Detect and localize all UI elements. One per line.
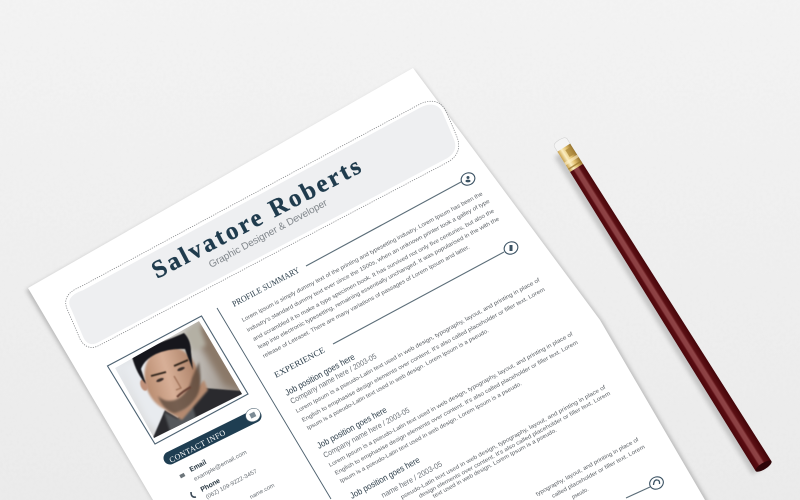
job entry 1: Ipsum is a pseudo-Latin text used in web design. Lorem Ipsum is a pseudo. (306, 328, 490, 432)
job entry 2: Company name here / 2003-05 (322, 405, 412, 460)
neck (165, 380, 208, 420)
profile summary text: release of Letraset. There are many variations of passages of Lorem Ipsum and latter. (262, 244, 471, 360)
job entry 3: name here / 2003-05 (380, 459, 444, 500)
panel: contact details (179, 450, 276, 500)
phone label: Phone (200, 478, 222, 494)
profile summary text: Lorem Ipsum is simply dummy text of the printing and typesetting industry. Lorem Ipsum has been the (241, 191, 484, 324)
job entry 1: Job position goes here (283, 352, 357, 398)
job entry 3: text used in web design. Lorem Ipsum is a pseudo. (432, 427, 558, 500)
icon: lower section line and marker (626, 475, 665, 498)
pencil body (569, 163, 771, 471)
job entry 2: Lorem Ipsum is a pseudo-Latin text used in web design, typography, layout, and printing in place of (328, 331, 574, 469)
job title: Graphic Designer & Developer (207, 197, 330, 271)
icon: contact marker (243, 406, 263, 424)
job entry 3: Job position goes here (348, 455, 422, 500)
icon: profile section line and marker (306, 171, 477, 266)
jacket and shirt (153, 388, 242, 438)
job entry 3: design elements over content. It's also called placeholder or filler text. Lorem (418, 391, 612, 500)
icon: experience section line and marker (333, 240, 520, 344)
panel: profile summary (230, 191, 501, 360)
resume sheet (26, 68, 709, 500)
contact info bar (168, 406, 263, 465)
panel: experience (272, 277, 646, 500)
job entry 2: Ipsum is a pseudo-Latin text used in web design. Lorem Ipsum is a pseudo. (339, 381, 523, 485)
sidebar divider (217, 308, 331, 499)
photo frame (108, 316, 248, 444)
email label: Email (189, 459, 208, 474)
profile summary text: and scrambled it to make a type specimen book. It has survived not only five centuries, but also the (252, 208, 496, 343)
contact info bar: CONTACT INFO (168, 428, 227, 465)
job entry 3: pseudo-Latin text used in web design, typography, layout, and printing in place of (400, 385, 607, 500)
job entry 1: Company name here / 2003-05 (289, 351, 379, 406)
name heading: Salvatore Roberts (147, 153, 366, 284)
icon: phone (191, 492, 196, 497)
heading: experience: EXPERIENCE (272, 345, 326, 380)
beard (158, 362, 201, 413)
heading: profile summary: PROFILE SUMMARY (230, 265, 301, 309)
eyes and brows (151, 360, 188, 383)
ferrule (557, 144, 583, 172)
ear (140, 379, 148, 392)
email address: example@email.com (193, 450, 248, 483)
hair (132, 333, 193, 384)
phone number: (062) 109-9222-3457 (205, 469, 258, 500)
header band (66, 101, 459, 347)
profile summary text (241, 191, 501, 360)
job entry 1 (283, 277, 546, 432)
profile summary text: leap into electronic typesetting, remaining essentially unchanged. It was popularised in the with the (257, 216, 501, 351)
job entry 1: Lorem Ipsum is a pseudo-Latin text used in web design, typography, layout, and printing in place of (295, 277, 541, 415)
job entry 2: English to emphasise design elements over content. It's also called placeholder or filler text. Lorem (334, 340, 579, 477)
eraser (553, 136, 571, 152)
profile summary text: industry's standard dummy text ever since the 1500s, when an unknown printer took a galley of type (246, 199, 491, 334)
job entry 2 (315, 331, 579, 485)
job entry 1: English to emphasise design elements over content. It's also called placeholder or filler text. Lorem (301, 287, 546, 424)
portrait photo (115, 321, 246, 445)
face (143, 348, 200, 412)
nose (174, 376, 181, 390)
mustache and mouth (177, 387, 191, 397)
job entry 3 (348, 385, 612, 500)
job entry 4: typography, layout, and printing in place of (535, 437, 640, 498)
pencil (547, 135, 773, 476)
icon: email (179, 473, 185, 478)
job entry 2: Job position goes here (315, 405, 389, 451)
job entry 4: called placeholder or filler text. Lorem (551, 444, 646, 500)
